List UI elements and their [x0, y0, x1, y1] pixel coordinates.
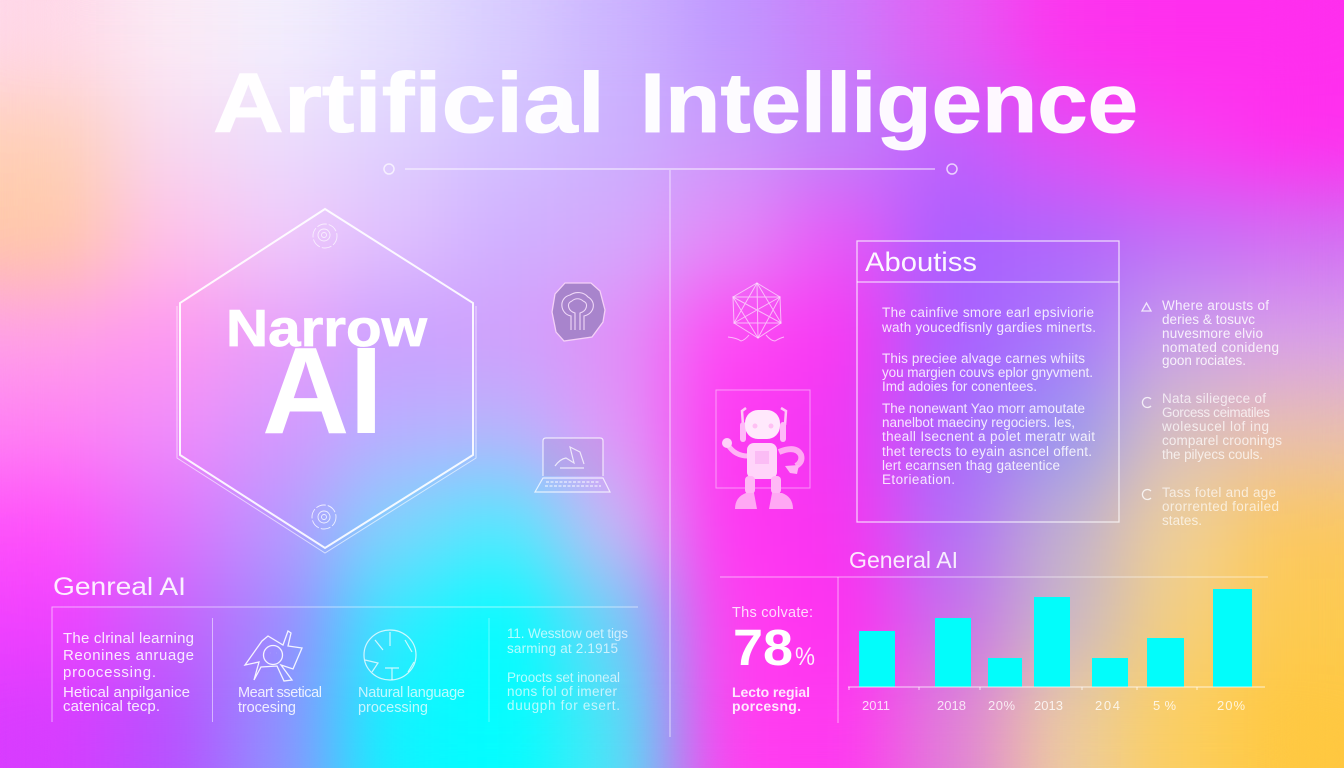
bullet text 2: wolesucel lof ing: [1161, 419, 1269, 434]
icon: robot in frame: [716, 390, 810, 509]
axis labels: [862, 698, 1245, 713]
heading: General AI: [849, 547, 958, 573]
text block: about paragraphs: The nonewant Yao morr amoutate: [882, 401, 1085, 416]
icon: polyhedron network: [728, 283, 784, 341]
icon caption: right: processing: [358, 700, 428, 716]
hexagon outline: [177, 209, 476, 553]
panel rules: [52, 607, 638, 722]
text block: right description: sarming at 2.1915: [507, 641, 618, 656]
stat caption: [732, 684, 810, 714]
stat value: 78: [733, 619, 793, 676]
axis labels: 20%: [1217, 698, 1245, 713]
title: [213, 56, 1138, 150]
bar chart: [848, 589, 1265, 713]
text block: right description: Proocts set inoneal: [507, 670, 620, 685]
title divider with end circles: [384, 164, 957, 174]
panel: right bullet list: [1142, 298, 1282, 528]
text block: about paragraphs: lert ecarnsen thag gateentice: [882, 458, 1060, 473]
bars: [859, 589, 1252, 687]
text block: about paragraphs: wath youcedfisnly gardies minerts.: [881, 320, 1096, 335]
text block: right description: 11. Wesstow oet tigs: [507, 626, 628, 641]
bullet text 1: Where arousts of: [1162, 298, 1269, 313]
robot legs and feet: [745, 476, 755, 494]
stat value: [733, 619, 815, 676]
text block: left description: catenical tecp.: [63, 698, 160, 715]
axis labels: 2018: [937, 698, 966, 713]
text block: left description: Reonines anruage: [63, 647, 194, 664]
bullet text 3: states.: [1162, 513, 1202, 528]
bullet text 3: [1162, 485, 1279, 528]
bullet text 1: goon rociates.: [1162, 353, 1246, 368]
text block: left description: Hetical anpilganice: [63, 684, 190, 701]
robot antennae and ears: [742, 408, 786, 425]
bullet text 2: comparel croonings: [1162, 433, 1282, 448]
robot head: [745, 410, 780, 439]
bullet text 3: Tass fotel and age: [1162, 485, 1276, 500]
axis labels: 20%: [988, 698, 1015, 713]
bullet text 3: ororrented forailed: [1162, 499, 1279, 514]
panel: general AI bottom-left: [52, 573, 638, 722]
text block: about paragraphs: theall Isecnent a polet meratr wait: [882, 429, 1095, 444]
bullet text 1: [1162, 298, 1279, 368]
panel frame: [857, 241, 1119, 522]
icon caption: right: Natural language: [358, 685, 465, 701]
icon: laptop: [535, 438, 610, 492]
icon caption: left: trocesing: [238, 700, 296, 716]
bullet text 2: [1161, 391, 1282, 462]
icon: globe cycle: [364, 630, 416, 680]
text block: left description: The clrinal learning: [63, 630, 194, 647]
axis labels: 2011: [862, 698, 890, 713]
centre vertical divider: [669, 170, 671, 737]
hexagon heading: Narrow: Narrow: [226, 300, 428, 358]
heading: Genreal AI: [53, 573, 186, 601]
robot body: [747, 443, 777, 479]
panel rules: [720, 577, 1268, 723]
axis labels: 5%: [1153, 698, 1176, 713]
text block: about paragraphs: This preciee alvage carnes whiits: [882, 351, 1085, 366]
text block: right description: [507, 626, 628, 713]
bullet text 2: Nata siliegece of: [1162, 391, 1266, 406]
bullet text 1: deries & tosuvc: [1162, 312, 1255, 327]
title: Artificial: [213, 56, 605, 150]
icon caption: right: [358, 685, 465, 716]
axis labels: 204: [1095, 698, 1120, 713]
panel: general AI chart: [720, 547, 1268, 723]
text block: about paragraphs: thet terects to eyain asncel offent.: [882, 444, 1092, 459]
icon: bottom swirl: [312, 505, 336, 529]
icon caption: left: [238, 685, 322, 716]
icon: brain badge: [552, 283, 605, 341]
panel: about: [857, 241, 1119, 522]
panel heading: Aboutiss: [865, 247, 977, 277]
robot arms: [728, 445, 748, 456]
stat label: Ths colvate:: [732, 605, 813, 621]
axis: [848, 687, 1265, 690]
text block: about paragraphs: The cainfive smore earl epsiviorie: [882, 305, 1094, 320]
text block: left description: proocessing.: [63, 664, 156, 681]
bullet text 1: nuvesmore elvio: [1162, 326, 1263, 341]
icon: gear face: [245, 631, 302, 681]
icon caption: left: Meart ssetical: [238, 685, 322, 701]
bullet text 2: the pilyecs couls.: [1162, 447, 1263, 462]
stat caption: porcesng.: [732, 698, 801, 714]
bullet markers: [1142, 303, 1151, 500]
text block: left description: [63, 630, 194, 715]
title: Intelligence: [640, 56, 1138, 150]
hexagon heading: AI: AI: [262, 323, 383, 460]
axis labels: 2013: [1034, 698, 1063, 713]
text block: about paragraphs: Imd adoies for conentees.: [882, 379, 1037, 394]
icon: top swirl: [313, 224, 337, 248]
stat caption: Lecto regial: [732, 684, 810, 700]
bullet text 1: nomated conideng: [1162, 340, 1279, 355]
panel: narrow AI hexagon: [177, 209, 476, 553]
bullet text 2: Gorcess ceimatiles: [1162, 405, 1270, 420]
text block: right description: duugph for esert.: [507, 698, 620, 713]
text block: right description: nons fol of imerer: [507, 684, 618, 699]
text block: about paragraphs: Etorieation.: [882, 472, 955, 487]
text block: about paragraphs: you margien couvs eplor gnyvment.: [882, 365, 1093, 380]
text block: about paragraphs: nanelbot maeciny regociers. les,: [882, 415, 1075, 430]
text block: about paragraphs: [881, 305, 1096, 487]
stat value: %: [795, 643, 815, 671]
